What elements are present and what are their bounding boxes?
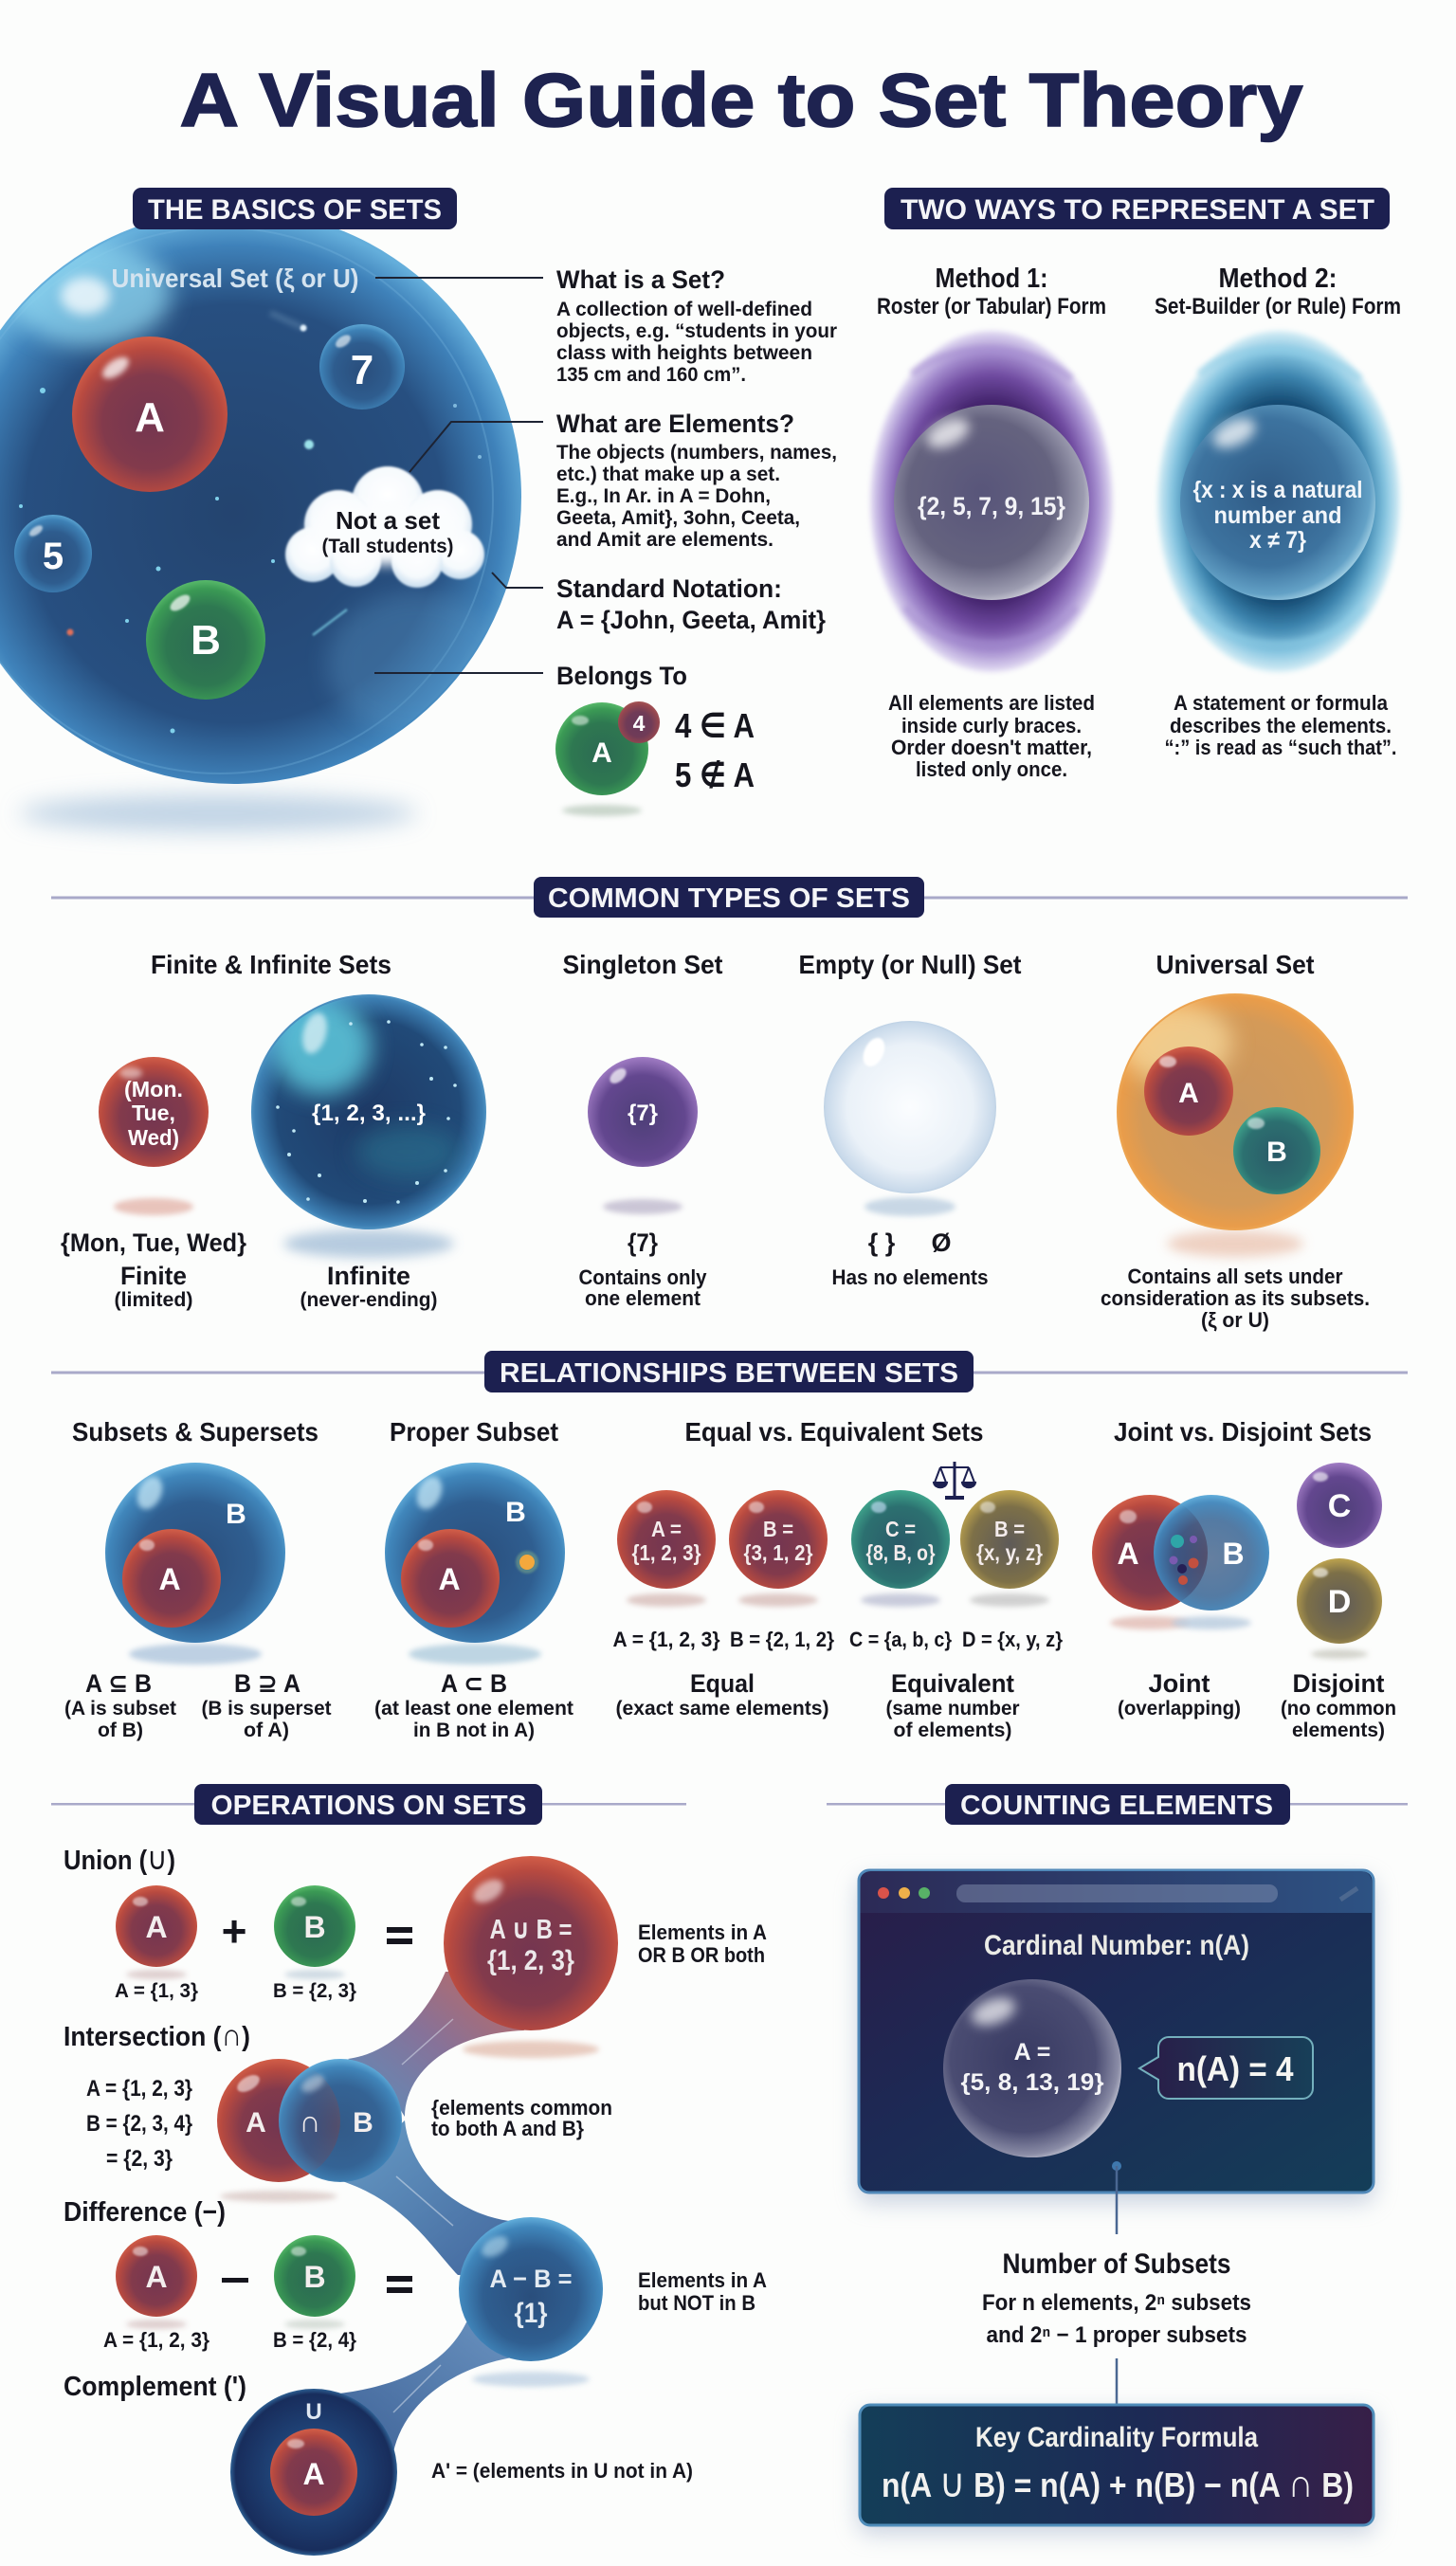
cloud: not a set: Not a set	[336, 506, 440, 535]
empty caption: { }	[868, 1228, 896, 1257]
empty caption: Ø	[931, 1228, 952, 1257]
plus sign: +	[222, 1906, 246, 1956]
type headings: Universal Set	[1156, 950, 1314, 979]
connector tubes	[313, 1972, 524, 2455]
intersection sets text: B = {2, 3, 4}	[86, 2111, 192, 2137]
set definitions: D = {x, y, z}	[962, 1628, 1063, 1651]
set definitions: C = {a, b, c}	[849, 1628, 952, 1651]
universal caption: Contains all sets under	[1128, 1265, 1343, 1288]
panel: the basics of sets	[0, 188, 837, 832]
element 7: 7	[351, 347, 373, 393]
intersection sets text: A = {1, 2, 3}	[86, 2076, 192, 2102]
formula box	[858, 2405, 1374, 2534]
equivalent set C	[851, 1490, 950, 1607]
sphere A	[72, 337, 228, 492]
superset caption: of A)	[244, 1720, 289, 1741]
set definitions: A = {1, 2, 3}	[612, 1628, 720, 1651]
orange set B: B	[1266, 1137, 1287, 1168]
joint caption: (overlapping)	[1118, 1698, 1241, 1720]
union set A	[116, 1885, 197, 1979]
equivalent caption: Equivalent	[891, 1669, 1014, 1698]
difference set A: A	[145, 2260, 168, 2294]
difference label B: B = {2, 4}	[273, 2328, 356, 2352]
text block: what are elements: What are Elements?	[556, 409, 794, 438]
joint sets diagram: A	[1117, 1537, 1139, 1571]
joint sets diagram: B	[1222, 1537, 1245, 1571]
text block: what are elements: E.g., In Ar. in A = Dohn,	[556, 485, 771, 507]
universal caption: consideration as its subsets.	[1101, 1286, 1370, 1310]
icon: belongs-to spheres: 4	[633, 711, 646, 736]
union result sphere: A ∪ B =	[489, 1915, 573, 1945]
finite set sphere: Tue,	[132, 1101, 175, 1125]
text block: what are elements: The objects (numbers, names,	[556, 442, 837, 464]
equal caption: Equal	[690, 1669, 755, 1698]
subset diagram	[105, 1463, 285, 1665]
type headings: Singleton Set	[563, 950, 722, 979]
finite set sphere: (Mon.	[124, 1077, 183, 1101]
joint caption: Joint	[1149, 1669, 1210, 1698]
intersection diagram: A	[246, 2107, 266, 2138]
section heading: common types	[534, 877, 924, 918]
union set B	[274, 1885, 355, 1979]
equivalent caption	[885, 1669, 1020, 1741]
icon: balance scale	[934, 1462, 975, 1498]
equivalent caption: (same number	[885, 1698, 1020, 1720]
proper subset diagram: B	[505, 1497, 526, 1528]
equivalent caption: of elements)	[893, 1720, 1012, 1741]
connector: subsets to formula	[1116, 2358, 1118, 2404]
orange set A: A	[1178, 1078, 1199, 1109]
panel: relationships between sets	[51, 1351, 1408, 1741]
subset diagram: B	[226, 1499, 246, 1530]
sphere B	[146, 580, 265, 700]
proper subset caption	[374, 1669, 573, 1741]
proper subset caption: in B not in A)	[413, 1720, 535, 1741]
disjoint set D	[1297, 1558, 1382, 1659]
superset caption	[201, 1669, 332, 1741]
universal set sphere with A and B	[1117, 993, 1354, 1257]
section heading: relationships: RELATIONSHIPS BETWEEN SETS	[500, 1358, 958, 1389]
equal set B: {3, 1, 2}	[743, 1540, 813, 1565]
text block: number of subsets: For n elements, 2ⁿ subsets	[982, 2290, 1251, 2316]
intersection diagram: ∩	[300, 2104, 320, 2138]
section heading: relationships	[484, 1351, 974, 1392]
section heading: counting: COUNTING ELEMENTS	[960, 1791, 1273, 1821]
type headings: Finite & Infinite Sets	[151, 950, 391, 979]
text block: standard notation: Standard Notation:	[556, 574, 782, 603]
subset caption: of B)	[98, 1720, 143, 1741]
panel: two ways to represent a set	[870, 188, 1401, 781]
element 7	[319, 324, 405, 409]
callout: n(A) = 4	[1139, 2037, 1313, 2099]
disjoint set D: D	[1328, 1584, 1351, 1620]
relationship headings: Equal vs. Equivalent Sets	[684, 1417, 984, 1447]
union set B: B	[303, 1910, 326, 1944]
empty caption: Has no elements	[832, 1265, 988, 1289]
proper subset diagram	[385, 1463, 565, 1665]
proper subset caption: A ⊂ B	[441, 1669, 507, 1698]
set definitions	[612, 1628, 1063, 1651]
equivalent set C: C =	[885, 1517, 916, 1541]
equivalent set C: {8, B, o}	[866, 1540, 936, 1565]
callout lines	[374, 278, 543, 673]
proper subset caption: (at least one element	[374, 1698, 573, 1720]
equal caption: (exact same elements)	[616, 1698, 828, 1720]
method 2 heading: Set-Builder (or Rule) Form	[1155, 294, 1401, 319]
title: A Visual Guide to Set Theory	[180, 58, 1303, 142]
method 2 heading	[1155, 264, 1401, 319]
singleton set sphere: {7}	[628, 1101, 658, 1126]
intersection heading: Intersection (∩)	[64, 2017, 250, 2052]
section heading: basics: THE BASICS OF SETS	[148, 194, 442, 226]
difference result sphere: A − B =	[489, 2265, 573, 2293]
text block: standard notation	[556, 574, 826, 634]
roster form orb: {2, 5, 7, 9, 15}	[918, 492, 1065, 520]
universal set sphere	[0, 209, 521, 784]
singleton set sphere	[588, 1057, 698, 1214]
text block: belongs to: 5 ∉ A	[675, 755, 755, 794]
singleton caption: Contains only	[578, 1265, 707, 1289]
panel: operations on sets	[51, 1784, 767, 2556]
equal set B	[729, 1490, 828, 1607]
text block: belongs to: Belongs To	[556, 662, 687, 690]
difference set B: B	[303, 2260, 326, 2294]
superset caption: B ⊇ A	[234, 1669, 300, 1698]
difference set A	[116, 2235, 197, 2329]
finite caption: (limited)	[114, 1289, 193, 1311]
infinite set sphere: {1, 2, 3, ...}	[312, 1101, 426, 1126]
set-builder form orb	[1157, 331, 1400, 672]
formula box: n(A ∪ B) = n(A) + n(B) − n(A ∩ B)	[882, 2461, 1354, 2505]
finite set sphere: Wed)	[128, 1125, 179, 1150]
text block: what are elements	[556, 409, 837, 551]
disjoint caption: elements)	[1292, 1720, 1385, 1741]
section heading: operations: OPERATIONS ON SETS	[210, 1791, 527, 1821]
equivalent set D: B =	[994, 1517, 1025, 1541]
universal caption	[1101, 1265, 1370, 1332]
callout: n(A) = 4: n(A) = 4	[1177, 2049, 1293, 2088]
finite caption	[61, 1228, 246, 1311]
text block: what is a set: class with heights between	[556, 342, 812, 364]
complement diagram: U	[305, 2399, 322, 2425]
disjoint caption	[1281, 1669, 1396, 1741]
equals sign	[387, 2276, 412, 2293]
difference description: Elements in A	[638, 2268, 767, 2292]
disjoint caption: (no common	[1281, 1698, 1396, 1720]
panel: common types of sets	[51, 877, 1408, 1332]
joint sets diagram	[1092, 1495, 1269, 1629]
formula box: Key Cardinality Formula	[975, 2422, 1258, 2453]
subset caption: A ⊆ B	[85, 1669, 152, 1698]
set-builder caption: describes the elements.	[1170, 714, 1392, 737]
finite caption: Finite	[120, 1262, 187, 1290]
intersection diagram: B	[353, 2107, 373, 2138]
sphere B: B	[191, 617, 221, 664]
text block: number of subsets: and 2ⁿ − 1 proper subsets	[986, 2322, 1247, 2348]
proper subset diagram: A	[438, 1562, 461, 1596]
equal set A	[617, 1490, 716, 1607]
minus sign	[222, 2278, 248, 2283]
window dots	[878, 1887, 930, 1899]
subset caption: (A is subset	[64, 1698, 176, 1720]
text block: what is a set: 135 cm and 160 cm”.	[556, 364, 746, 386]
text block: what is a set: objects, e.g. “students in your	[556, 320, 837, 342]
subset diagram: A	[158, 1562, 181, 1596]
method 1 heading: Method 1:	[935, 264, 1048, 294]
infinite set sphere	[251, 994, 486, 1258]
intersection description: {elements common	[431, 2096, 612, 2120]
text block: what are elements: etc.) that make up a set.	[556, 464, 780, 485]
element 5	[14, 515, 92, 592]
difference heading: Difference (−)	[64, 2197, 226, 2228]
method 2 heading: Method 2:	[1219, 264, 1337, 294]
singleton caption: {7}	[628, 1228, 658, 1257]
relationship headings: Joint vs. Disjoint Sets	[1114, 1417, 1372, 1447]
text block: what is a set: A collection of well-defined	[556, 299, 812, 320]
text block: what are elements: Geeta, Amit}, 3ohn, Ceeta,	[556, 507, 800, 529]
type headings: Empty (or Null) Set	[798, 950, 1022, 979]
orange set A	[1144, 1046, 1233, 1136]
union description: OR B OR both	[638, 1943, 765, 1967]
set-builder caption	[1164, 691, 1397, 759]
subset caption	[64, 1669, 176, 1741]
roster caption: Order doesn't matter,	[891, 736, 1092, 759]
roster caption	[888, 691, 1095, 781]
set-builder form orb: x ≠ 7}	[1249, 527, 1306, 554]
cloud: not a set	[285, 466, 484, 588]
section heading: operations	[194, 1784, 542, 1825]
set-builder caption: A statement or formula	[1174, 691, 1389, 715]
icon: belongs-to spheres: A	[592, 737, 612, 769]
disjoint set C	[1297, 1463, 1382, 1548]
empty caption	[832, 1228, 988, 1289]
intersection description: to both A and B}	[431, 2117, 584, 2140]
method 1 heading	[877, 264, 1106, 319]
text block: what are elements: and Amit are elements.	[556, 529, 774, 551]
set-builder form orb: {x : x is a natural	[1192, 477, 1363, 503]
union label B: B = {2, 3}	[273, 1980, 356, 2002]
bubble: set A: A =	[1014, 2039, 1050, 2066]
equal set A: A =	[651, 1517, 682, 1541]
difference result sphere	[459, 2217, 603, 2387]
joint caption	[1118, 1669, 1241, 1720]
set-builder caption: “:” is read as “such that”.	[1164, 736, 1397, 759]
difference label A: A = {1, 2, 3}	[103, 2328, 209, 2352]
intersection diagram	[217, 2059, 402, 2202]
type headings	[151, 950, 1314, 979]
connector: window to subsets	[1112, 2161, 1121, 2234]
difference description	[638, 2268, 767, 2315]
text block: number of subsets: Number of Subsets	[1003, 2248, 1230, 2280]
text block: what is a set	[556, 265, 837, 386]
difference result sphere: {1}	[514, 2298, 548, 2329]
equivalent set D	[960, 1490, 1059, 1607]
method 1 heading: Roster (or Tabular) Form	[877, 294, 1106, 319]
roster caption: inside curly braces.	[901, 714, 1082, 737]
element 5: 5	[43, 536, 64, 577]
union result sphere: {1, 2, 3}	[487, 1945, 574, 1976]
singleton caption	[578, 1228, 707, 1310]
text block: standard notation: A = {John, Geeta, Amit}	[556, 606, 826, 634]
union description	[638, 1920, 767, 1967]
text block: number of subsets	[982, 2248, 1251, 2348]
roster caption: All elements are listed	[888, 691, 1095, 715]
set definitions: B = {2, 1, 2}	[730, 1628, 834, 1651]
cardinal number title: Cardinal Number: n(A)	[984, 1930, 1249, 1961]
finite set sphere	[99, 1057, 209, 1215]
section heading: two ways: TWO WAYS TO REPRESENT A SET	[901, 194, 1374, 226]
icon: belongs-to spheres	[555, 701, 660, 816]
section heading: basics	[133, 188, 457, 229]
complement heading: Complement (')	[64, 2372, 246, 2402]
text block: what is a set: What is a Set?	[556, 265, 725, 294]
union result sphere	[444, 1856, 618, 2058]
infinite caption	[300, 1262, 438, 1311]
orange set B	[1233, 1107, 1320, 1194]
complement description: A' = (elements in U not in A)	[431, 2459, 693, 2483]
section heading: common types: COMMON TYPES OF SETS	[548, 883, 910, 914]
union set A: A	[145, 1910, 168, 1944]
set-builder form orb: number and	[1213, 502, 1342, 529]
infinite caption: (never-ending)	[300, 1289, 438, 1311]
relationship headings: Subsets & Supersets	[72, 1417, 318, 1447]
disjoint caption: Disjoint	[1293, 1669, 1385, 1698]
complement diagram: A	[302, 2457, 325, 2491]
finite caption: {Mon, Tue, Wed}	[61, 1228, 246, 1257]
equal set B: B =	[763, 1517, 793, 1541]
sphere A: A	[135, 394, 165, 441]
equivalent set D: {x, y, z}	[976, 1540, 1043, 1565]
equals sign	[387, 1927, 412, 1944]
intersection description	[431, 2096, 612, 2140]
complement diagram	[230, 2389, 397, 2556]
infinite caption: Infinite	[327, 1262, 410, 1290]
roster caption: listed only once.	[916, 757, 1067, 781]
union description: Elements in A	[638, 1920, 767, 1944]
disjoint set C: C	[1328, 1488, 1351, 1524]
difference description: but NOT in B	[638, 2291, 755, 2315]
superset caption: (B is superset	[201, 1698, 332, 1720]
equal caption	[616, 1669, 828, 1720]
difference set B	[274, 2235, 355, 2329]
intersection sets text: = {2, 3}	[106, 2146, 173, 2172]
text block: belongs to: 4 ∈ A	[675, 706, 755, 745]
bubble: set A: {5, 8, 13, 19}	[961, 2069, 1104, 2096]
panel: counting elements	[827, 1784, 1408, 2534]
equal set A: {1, 2, 3}	[631, 1540, 701, 1565]
window panel: cardinal number	[858, 1870, 1374, 2203]
union heading: Union (∪)	[64, 1841, 175, 1876]
section heading: counting	[945, 1784, 1290, 1825]
universal set label: Universal Set (ξ or U)	[112, 264, 358, 293]
bubble: set A	[943, 1979, 1121, 2157]
empty set sphere	[824, 1021, 996, 1216]
intersection sets text	[86, 2076, 192, 2172]
cloud: not a set: (Tall students)	[322, 536, 453, 557]
roster form orb	[870, 331, 1113, 672]
universal set sphere shadow	[19, 794, 417, 832]
universal caption: (ξ or U)	[1201, 1308, 1269, 1332]
relationship headings: Proper Subset	[390, 1417, 558, 1447]
text block: belongs to	[555, 662, 755, 816]
union labels: A = {1, 3}	[115, 1980, 198, 2002]
singleton caption: one element	[585, 1286, 701, 1310]
relationship headings	[72, 1417, 1372, 1447]
